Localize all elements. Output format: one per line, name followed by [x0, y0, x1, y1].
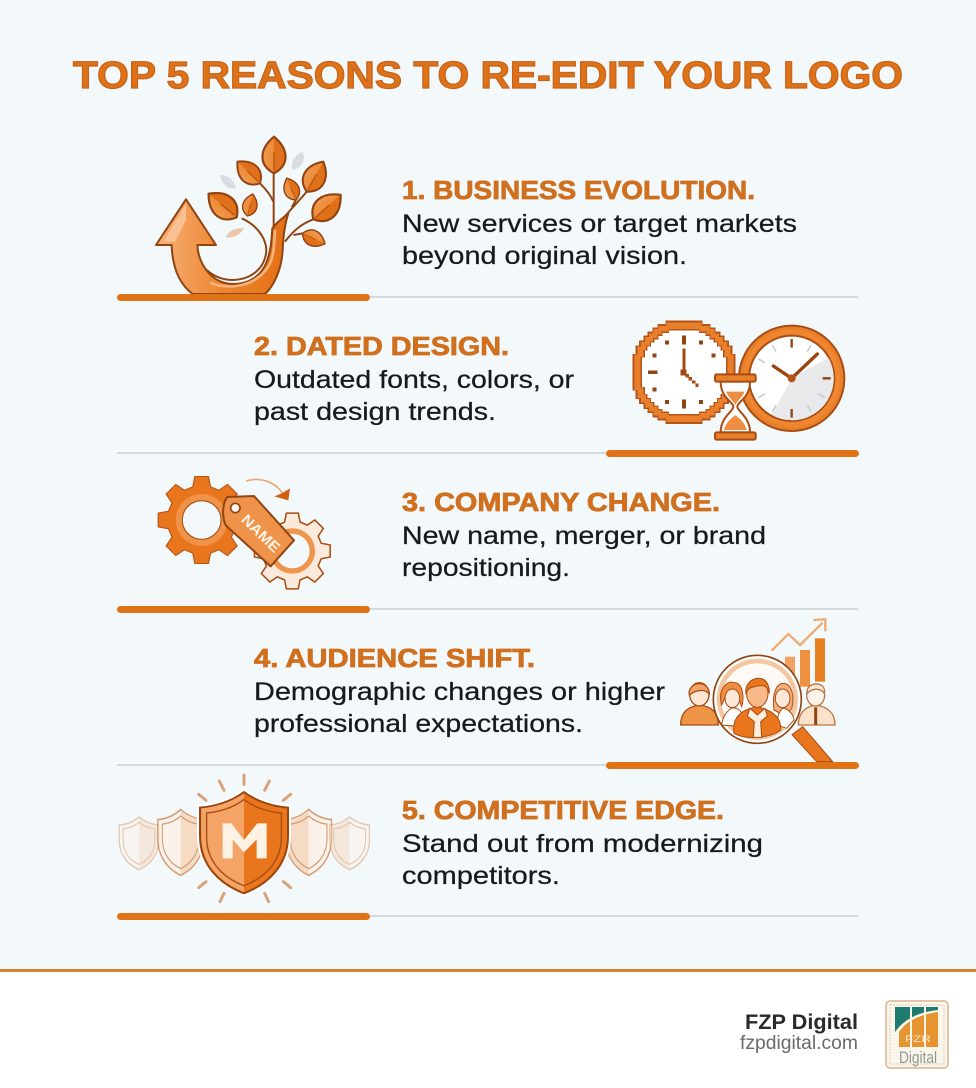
icon: name tag: NAME	[238, 512, 283, 556]
body text	[402, 522, 766, 582]
heading: 1. BUSINESS EVOLUTION.	[402, 175, 755, 205]
heading: 5. COMPETITIVE EDGE.	[402, 795, 724, 825]
icon: audience under magnifier with growth chart	[681, 619, 835, 762]
body text: past design trends.	[254, 398, 496, 426]
icon: arrow growing into a tree	[156, 137, 348, 294]
heading: 3. COMPANY CHANGE.	[402, 487, 720, 517]
body text	[402, 830, 763, 890]
divider	[117, 762, 859, 769]
body text	[402, 210, 797, 270]
body text: beyond original vision.	[402, 242, 687, 270]
divider	[117, 606, 858, 613]
logo	[886, 1001, 948, 1068]
divider	[117, 913, 858, 920]
body text: Stand out from modernizing	[402, 830, 763, 858]
footer	[0, 969, 976, 1088]
body text: New services or target markets	[402, 210, 797, 238]
icon: gears and name tag	[158, 477, 330, 589]
icon: modern clock	[739, 326, 844, 431]
body text: New name, merger, or brand	[402, 522, 766, 550]
body text: competitors.	[402, 862, 560, 890]
icon: right person	[798, 684, 835, 725]
body text	[254, 366, 574, 426]
icon: rays	[199, 775, 291, 902]
icon: main shield	[200, 792, 288, 893]
panel: reason 4 audience shift	[117, 619, 859, 769]
brand url: fzpdigital.com	[740, 1033, 858, 1054]
icon: curved arrow	[246, 479, 290, 500]
divider	[117, 450, 859, 457]
icon: solid gear	[158, 477, 245, 563]
heading: 4. AUDIENCE SHIFT.	[254, 643, 535, 673]
body text: Outdated fonts, colors, or	[254, 366, 574, 394]
brand name: FZP Digital	[745, 1011, 858, 1034]
icon: growth chart	[772, 619, 825, 687]
icon: left person	[681, 683, 718, 725]
panel: reason 3 company change	[117, 477, 858, 613]
logo: FZR	[905, 1034, 932, 1044]
panel: reason 1 business evolution	[117, 137, 858, 301]
body text	[254, 678, 665, 738]
icon: name tag	[223, 496, 294, 566]
icon: clocks and hourglass	[632, 321, 844, 440]
heading: 2. DATED DESIGN.	[254, 331, 509, 361]
body text: professional expectations.	[254, 710, 583, 738]
logo: Digital	[899, 1048, 937, 1067]
icon: pale gear	[254, 513, 330, 589]
icon: pixel clock	[632, 321, 736, 424]
icon: magnifier	[713, 655, 833, 762]
panel: reason 2 dated design	[117, 321, 859, 457]
body text: repositioning.	[402, 554, 570, 582]
body text: Demographic changes or higher	[254, 678, 665, 706]
icon: faded shields	[119, 809, 369, 875]
divider	[117, 294, 858, 301]
icon: hourglass	[715, 374, 756, 440]
title: TOP 5 REASONS TO RE-EDIT YOUR LOGO	[73, 55, 903, 97]
icon: shield among faded shields	[119, 775, 369, 902]
panel: reason 5 competitive edge	[117, 775, 858, 920]
